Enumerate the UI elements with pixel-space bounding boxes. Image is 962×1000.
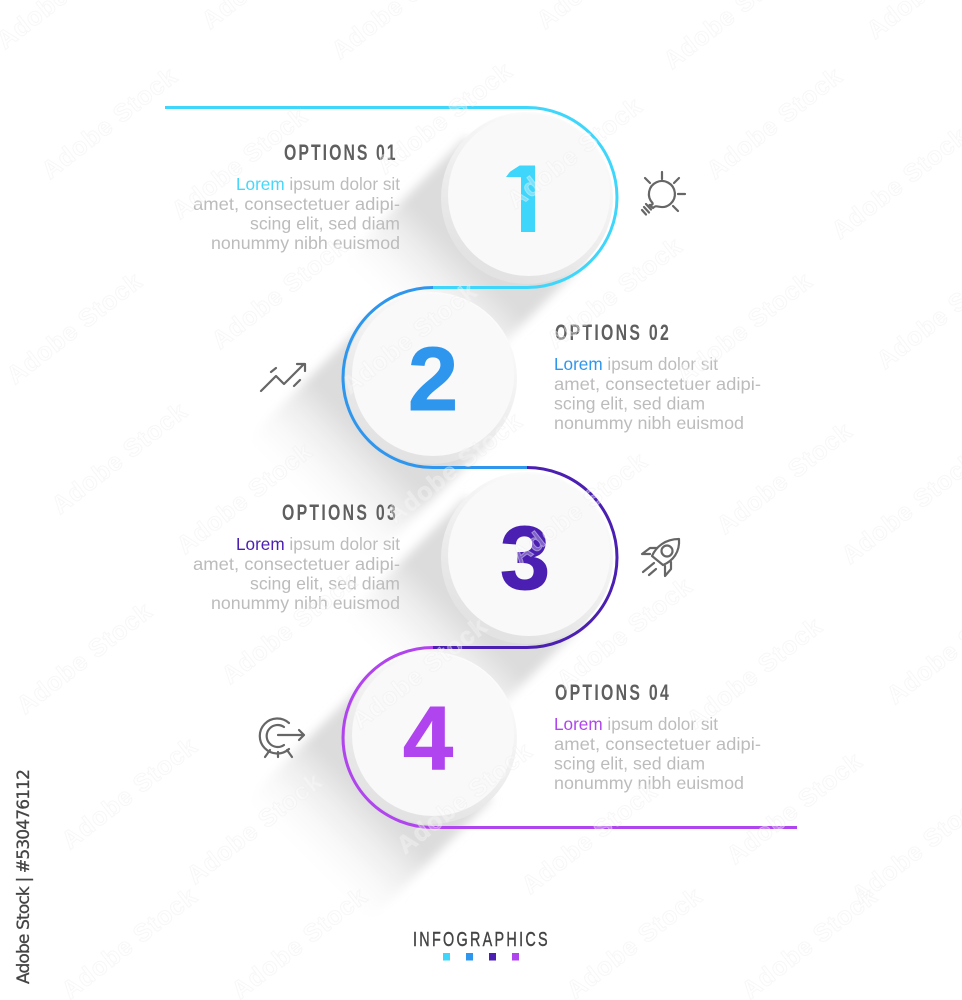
text block: options 04: amet, consectetuer adipi- xyxy=(554,734,761,754)
watermark: Adobe Stock xyxy=(391,737,538,860)
text block: options 02 xyxy=(554,322,761,433)
watermark: Adobe Stock xyxy=(346,612,493,735)
watermark: Adobe Stock xyxy=(701,62,848,185)
icon: rocket xyxy=(642,539,679,576)
text block: options 04 xyxy=(554,682,761,793)
footer colour squares xyxy=(443,953,519,960)
watermark: Adobe Stock xyxy=(36,62,183,185)
watermark: Adobe Stock xyxy=(206,232,353,355)
text block: options 04: scing elit, sed diam xyxy=(554,754,705,774)
text block: options 02: amet, consectetuer adipi- xyxy=(554,374,761,394)
watermark: Adobe Stock xyxy=(506,447,653,570)
text block: options 03: OPTIONS 03 xyxy=(282,502,396,526)
watermark: Adobe Stock xyxy=(171,437,318,560)
watermark: Adobe Stock xyxy=(681,612,828,735)
text block: options 03 xyxy=(193,502,400,613)
text block: options 04: nonummy nibh euismod xyxy=(554,773,744,793)
step 1 disc xyxy=(441,112,613,284)
icon: light bulb xyxy=(642,172,685,214)
watermark: Adobe Stock xyxy=(516,777,663,900)
watermark: Adobe Stock xyxy=(181,767,328,890)
step 4 disc xyxy=(345,652,517,824)
text block: options 04: OPTIONS 04 xyxy=(555,682,669,706)
text block: options 01: scing elit, sed diam xyxy=(250,214,400,234)
icon: target xyxy=(260,719,304,757)
connector line: blue xyxy=(343,288,527,468)
text block: options 01: Lorem ipsum dolor sit xyxy=(236,174,400,194)
watermark: Adobe Stock xyxy=(11,597,158,720)
text block: options 03: nonummy nibh euismod xyxy=(211,593,400,613)
connector line: cyan xyxy=(165,108,617,288)
stock id side label: Adobe Stock | #530476112 xyxy=(14,769,34,984)
connector line: indigo xyxy=(433,468,617,648)
text block: options 01: OPTIONS 01 xyxy=(284,142,396,166)
watermark: Adobe Stock xyxy=(216,567,363,690)
text block: options 03: amet, consectetuer adipi- xyxy=(193,554,400,574)
watermark: Adobe Stock xyxy=(721,747,868,870)
text block: options 01: amet, consectetuer adipi- xyxy=(193,194,400,214)
watermark: Adobe Stock xyxy=(371,57,518,180)
footer title: INFOGRAPHICS xyxy=(413,928,548,951)
number 1: 1 xyxy=(499,151,549,251)
text block: options 01 xyxy=(193,142,400,253)
text block: options 02: OPTIONS 02 xyxy=(555,322,669,346)
watermark: Adobe Stock xyxy=(1,267,148,390)
watermark: Adobe Stock xyxy=(551,572,698,695)
watermark: Adobe Stock xyxy=(671,267,818,390)
watermark: Adobe Stock xyxy=(46,397,193,520)
number 4: 4 xyxy=(403,689,453,789)
watermark: Adobe Stock xyxy=(166,102,313,225)
text block: options 01: nonummy nibh euismod xyxy=(211,233,400,253)
text block: options 02: Lorem ipsum dolor sit xyxy=(554,354,718,374)
long shadows behind discs xyxy=(240,137,588,929)
icon: trend arrow xyxy=(261,364,305,391)
step 3 disc xyxy=(441,472,613,644)
text block: options 02: nonummy nibh euismod xyxy=(554,413,744,433)
connector line: purple xyxy=(343,648,797,828)
watermark: Adobe Stock xyxy=(501,92,648,215)
watermark: Adobe Stock xyxy=(541,232,688,355)
number 3: 3 xyxy=(500,509,550,609)
watermark: Adobe Stock xyxy=(336,277,483,400)
text block: options 02: scing elit, sed diam xyxy=(554,394,705,414)
text block: options 04: Lorem ipsum dolor sit xyxy=(554,714,718,734)
step 2 disc xyxy=(345,292,517,464)
watermark: Adobe Stock xyxy=(56,732,203,855)
number 2: 2 xyxy=(408,330,458,430)
text block: options 03: Lorem ipsum dolor sit xyxy=(236,534,400,554)
text block: options 03: scing elit, sed diam xyxy=(250,574,400,594)
watermark: Adobe Stock xyxy=(711,417,858,540)
watermark: Adobe Stock xyxy=(381,407,528,530)
